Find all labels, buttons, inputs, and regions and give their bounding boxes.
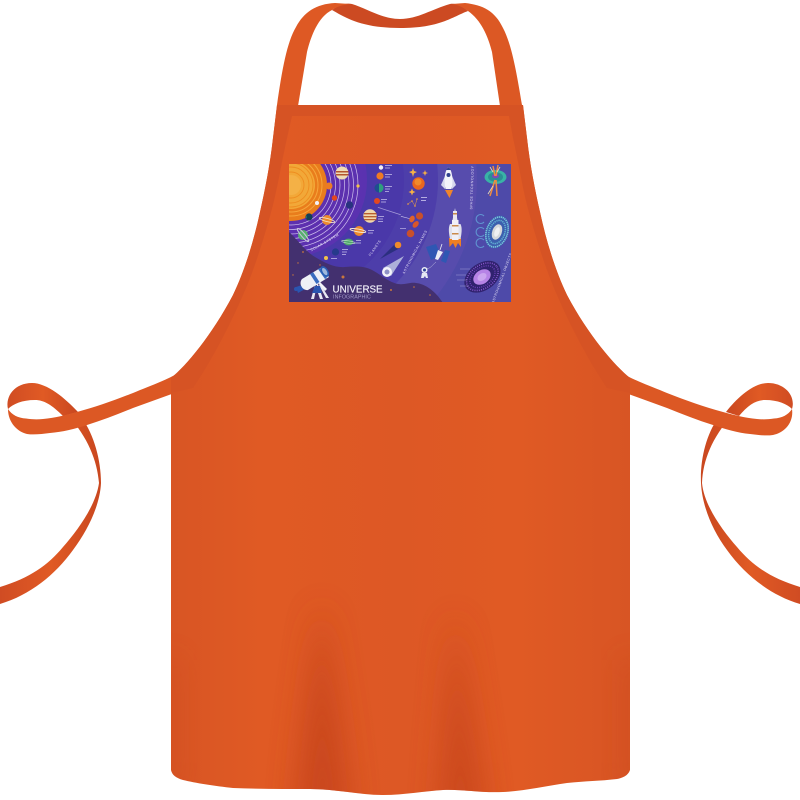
green saturn xyxy=(344,239,353,245)
heading: planets: PLANETS xyxy=(368,239,382,257)
icon: telescope xyxy=(294,265,331,299)
heading: space technology: SPACE TECHNOLOGY xyxy=(469,165,475,209)
right tie long strand xyxy=(701,415,800,604)
icon: sun xyxy=(289,164,327,221)
title: universe: UNIVERSE xyxy=(332,284,383,296)
icon: asteroids xyxy=(400,212,423,237)
large striped planet xyxy=(363,209,377,223)
icon: stars and orange planet xyxy=(408,168,428,196)
left tie long strand xyxy=(0,415,101,604)
left waist tie xyxy=(0,372,180,604)
heading: astronomical objects: ASTRONOMICAL OBJECTS xyxy=(491,252,513,304)
right tie loop back xyxy=(726,383,793,416)
heading: solar system: SOLAR SYSTEM xyxy=(310,233,340,252)
icon: meteor xyxy=(380,242,401,259)
poster background bands xyxy=(289,164,511,302)
solar system planets xyxy=(296,166,360,243)
orange saturn xyxy=(354,226,364,236)
orange ringed planet xyxy=(322,215,332,225)
icon: three arc symbols xyxy=(476,214,484,247)
neck strap xyxy=(332,4,468,28)
heading: astronomical names: ASTRONOMICAL NAMES xyxy=(402,229,428,275)
dark ground with stars xyxy=(289,232,443,303)
green ringed planet xyxy=(298,230,308,240)
icon: purple galaxy xyxy=(456,260,500,293)
hem band xyxy=(171,105,630,393)
right tie front band xyxy=(620,372,792,435)
icon: wormhole xyxy=(484,165,506,196)
planets column xyxy=(324,165,384,260)
icon: spiral galaxy xyxy=(484,216,510,248)
icon: comet xyxy=(382,256,404,277)
fabric folds xyxy=(292,650,630,794)
striped planet xyxy=(336,166,348,180)
right waist tie xyxy=(620,372,800,604)
orbit rings xyxy=(289,164,358,250)
planet labels xyxy=(331,165,401,259)
icon: constellation xyxy=(407,197,427,207)
icon: white rocket xyxy=(441,167,456,198)
icon: satellite xyxy=(426,244,450,263)
poster: universe infographic xyxy=(289,164,511,302)
left shoulder strap xyxy=(277,3,350,106)
right shoulder strap xyxy=(452,3,522,106)
apron body xyxy=(160,105,641,800)
icon: astronaut xyxy=(421,262,436,278)
left tie front band xyxy=(8,372,180,434)
left tie loop back xyxy=(7,383,78,416)
icon: multi-stage rocket xyxy=(449,208,462,248)
subtitle: infographic: INFOGRAPHIC xyxy=(333,294,371,300)
